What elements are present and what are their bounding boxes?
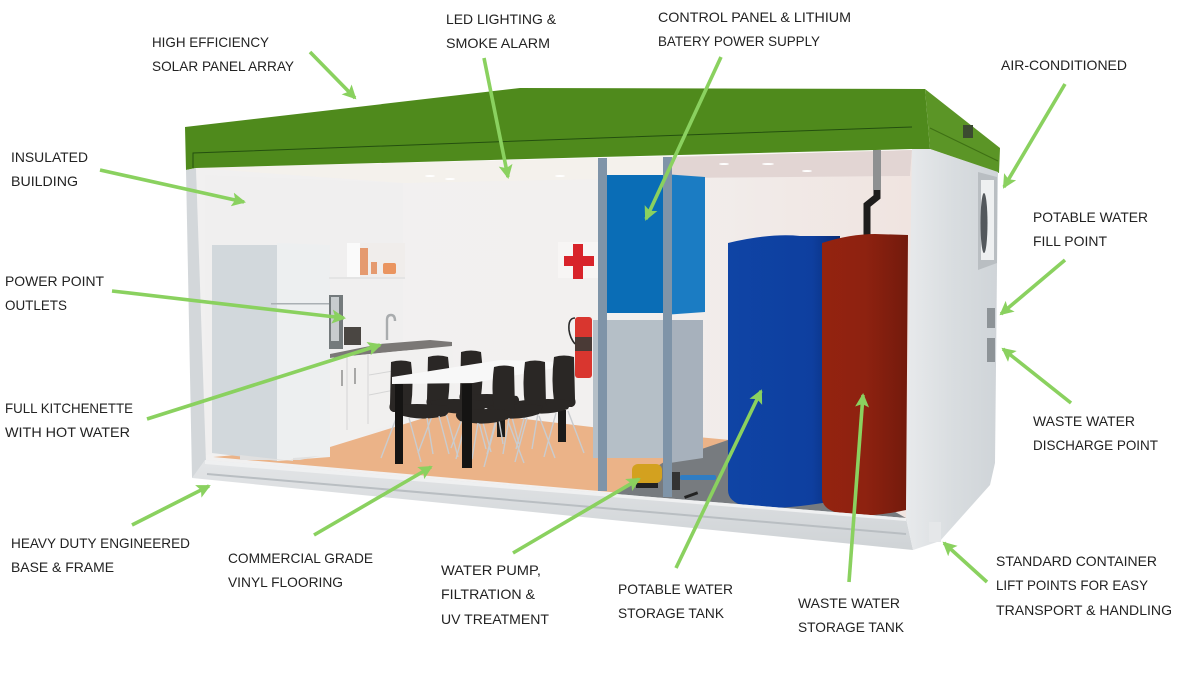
label: potable water fill point <box>1033 209 1148 249</box>
arrow: insulated building <box>100 170 244 202</box>
water fill point <box>987 308 995 328</box>
label: vinyl flooring: COMMERCIAL GRADE <box>228 550 373 566</box>
label: LED lighting: SMOKE ALARM <box>446 35 550 51</box>
arrow: solar panel <box>310 52 355 98</box>
vent pipe <box>867 150 881 235</box>
left kitchen wall <box>205 175 403 455</box>
label: lift points: LIFT POINTS FOR EASY <box>996 577 1149 593</box>
first aid cabinet with red cross <box>558 242 598 279</box>
container building <box>185 88 1000 550</box>
power point rack and microwave <box>329 295 361 349</box>
arrow: power outlets <box>112 291 344 318</box>
label: base and frame: HEAVY DUTY ENGINEERED <box>11 535 190 551</box>
label: waste water discharge: WASTE WATER <box>1033 413 1135 429</box>
label: insulated building: INSULATED <box>11 149 88 165</box>
label: control panel <box>658 9 851 49</box>
lift point <box>929 522 941 542</box>
label: waste tank: WASTE WATER <box>798 595 900 611</box>
label: power point outlets <box>5 273 104 313</box>
label: insulated building: BUILDING <box>11 173 78 189</box>
label: power point outlets: POWER POINT <box>5 273 104 289</box>
label: waste tank <box>798 595 905 635</box>
wall cupboard shelf with canisters <box>329 243 405 279</box>
arrow: control panel <box>646 57 721 219</box>
label: waste tank: STORAGE TANK <box>798 619 905 635</box>
kitchen cabinets <box>330 346 456 445</box>
water pump <box>632 464 716 499</box>
fridge <box>212 243 330 461</box>
arrow: vinyl flooring <box>314 467 431 535</box>
label: control panel: CONTROL PANEL & LITHIUM <box>658 9 851 25</box>
label: full kitchenette: FULL KITCHENETTE <box>5 400 133 416</box>
label: control panel: BATERY POWER SUPPLY <box>658 33 821 49</box>
label: solar panel array: HIGH EFFICIENCY <box>152 34 270 50</box>
label: water pump: FILTRATION & <box>441 586 536 602</box>
base frame <box>192 460 913 550</box>
label: base and frame: BASE & FRAME <box>11 559 114 575</box>
green roof front <box>185 88 930 170</box>
wood floor <box>213 410 906 518</box>
grey gravel floor in plant room <box>612 440 906 518</box>
label: water pump <box>441 562 549 627</box>
table top <box>392 360 560 384</box>
interior back wall <box>196 150 912 520</box>
label: water pump: WATER PUMP, <box>441 562 541 578</box>
label: potable water fill point: FILL POINT <box>1033 233 1107 249</box>
roof seam <box>193 127 912 168</box>
arrow: waste tank <box>849 395 863 582</box>
label: LED lighting: LED LIGHTING & <box>446 11 557 27</box>
air conditioner <box>978 172 997 270</box>
label: LED lighting <box>446 11 557 51</box>
green roof side <box>925 89 1000 173</box>
kitchen bench <box>330 340 452 358</box>
ceiling lights <box>425 163 812 180</box>
blue control panel and battery cabinet <box>607 174 705 315</box>
label: base and frame <box>11 535 190 575</box>
fire extinguisher <box>569 317 592 378</box>
label: waste water discharge <box>1033 413 1158 453</box>
label: potable water fill point: POTABLE WATER <box>1033 209 1148 225</box>
label: lift points: TRANSPORT & HANDLING <box>996 602 1172 618</box>
arrow: LED lighting <box>484 58 508 177</box>
arrow: potable water fill <box>1001 260 1065 314</box>
label: potable tank: STORAGE TANK <box>618 605 725 621</box>
arrow: waste discharge <box>1003 349 1071 403</box>
arrow: lift points <box>944 543 987 582</box>
arrow: water pump <box>513 479 639 553</box>
waste water discharge point <box>987 338 995 362</box>
potable water tank blue <box>728 235 840 508</box>
label: vinyl flooring: VINYL FLOORING <box>228 574 343 590</box>
arrow: potable tank <box>676 391 761 568</box>
label: potable tank: POTABLE WATER <box>618 581 733 597</box>
label: lift points: STANDARD CONTAINER <box>996 553 1157 569</box>
arrow: kitchenette <box>147 345 380 419</box>
waste water tank red <box>822 234 908 516</box>
left frame <box>186 168 206 478</box>
arrow: base frame <box>132 486 209 525</box>
plant room ceiling <box>672 150 912 178</box>
tap <box>387 315 395 340</box>
label: solar panel array <box>152 34 295 74</box>
tall grey cabinet <box>593 320 703 464</box>
label: full kitchenette <box>5 400 133 440</box>
label: power point outlets: OUTLETS <box>5 297 67 313</box>
structural columns <box>598 157 672 497</box>
right side wall <box>906 149 998 550</box>
arrow: air conditioned <box>1004 84 1065 187</box>
ceiling <box>196 150 912 183</box>
label: vinyl flooring <box>228 550 373 590</box>
label: water pump: UV TREATMENT <box>441 611 549 627</box>
label: air conditioned: AIR-CONDITIONED <box>1001 57 1127 73</box>
label: full kitchenette: WITH HOT WATER <box>5 424 130 440</box>
label: waste water discharge: DISCHARGE POINT <box>1033 437 1158 453</box>
label: lift points <box>996 553 1172 618</box>
label: solar panel array: SOLAR PANEL ARRAY <box>152 58 295 74</box>
label: potable tank <box>618 581 733 621</box>
label: insulated building <box>11 149 88 189</box>
dining table and chairs <box>381 350 584 468</box>
